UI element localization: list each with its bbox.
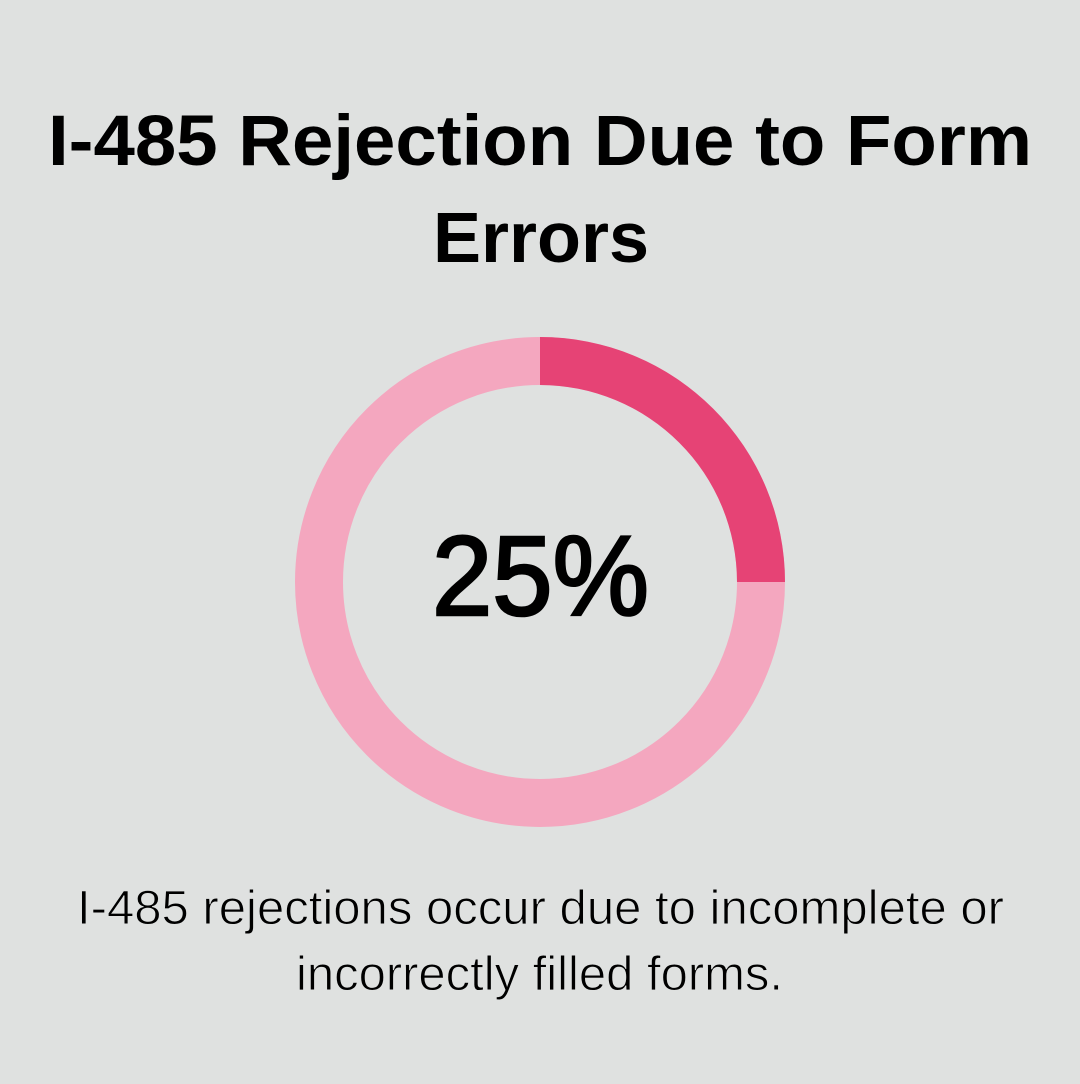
center value: 25% <box>432 513 649 639</box>
description: incorrectly filled forms. <box>296 948 783 1001</box>
description: I-485 rejections occur due to incomplete or <box>77 882 1004 935</box>
title <box>48 102 1032 278</box>
donut chart <box>319 337 785 803</box>
donut track: remaining 75% <box>319 361 761 803</box>
donut segment: 25% <box>540 337 785 582</box>
title: I-485 Rejection Due to Form <box>48 102 1032 181</box>
title: Errors <box>433 199 649 278</box>
description <box>77 882 1004 1001</box>
